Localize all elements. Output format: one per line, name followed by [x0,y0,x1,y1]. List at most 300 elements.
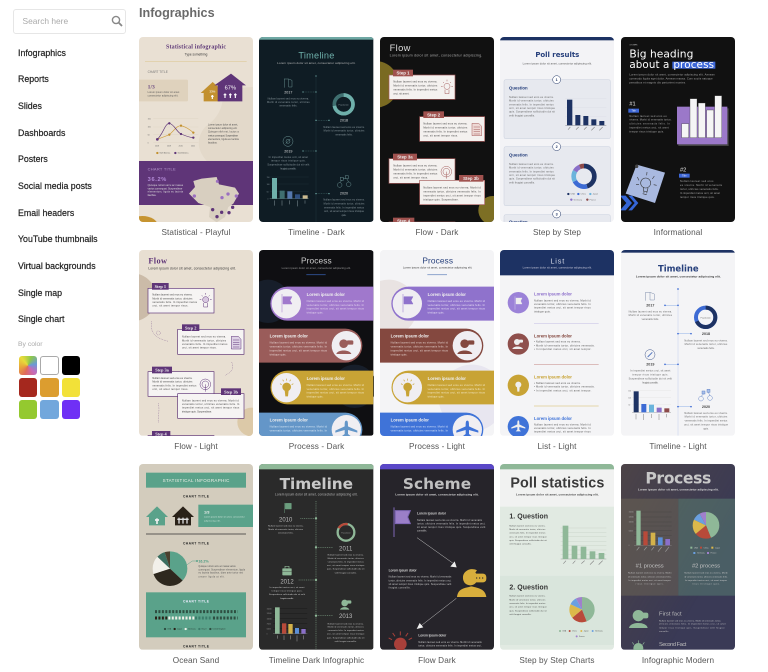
step 3a: Step 3a [397,154,413,159]
item 3: • Nullam laoreet sed eros eu viverra. [534,381,581,385]
card: Flow - Dark [380,37,494,222]
legend: France [579,636,585,638]
title: Lorem ipsum dolor sit amet, consectetur adipiscing. [389,53,482,57]
step #1: ultricies venenatis felis. In [629,121,671,125]
card: Process - Light [380,250,494,436]
step 1: Morbi id venenatis tortor, ultricies [393,83,438,87]
band 2: maroon: imperdiet metus orci, sit amet tempor risus [390,349,448,353]
panel: question 2: Nullam laoreet sed eros eu viverra. [510,595,546,598]
paragraph: Nullam laoreet sed eros eu viverra. [684,340,728,343]
header: STATISTICAL INFOGRAPHIC [163,478,230,483]
caption: Timeline Dark Infographic [269,656,364,665]
paragraph: In imperdiet metus orci, sit amet [270,586,305,589]
line chart: 2020 [179,145,183,147]
decoration: orange blob [127,216,158,234]
title: Lorem ipsum dolor sit amet, consectetur adipiscing elit. [282,266,352,270]
donut chart: Population [339,103,350,106]
icon: compass [645,350,655,360]
panel: pictogram chart [146,593,246,638]
one third callout: Lorem ipsum dolor sit amet, consectetur [204,516,245,519]
second fact: Second Fact [659,642,687,648]
bar chart: 100 [628,398,631,400]
bar chart [561,526,607,565]
title [148,257,236,271]
paragraph: Morbi id venenatis tortor, ultricies [267,101,311,104]
step #1 [628,101,672,133]
paragraph: Nullam laoreet sed eros eu viverra. [268,97,310,100]
text block 1: tortor, ultricies venenatis felis. In imperdiet metus orci, [417,523,485,526]
caption: Process - Dark [289,442,344,451]
band 3: yellow: Lorem ipsum dolor [307,376,346,381]
panel: process 1: 150000 [629,512,634,514]
bar chart: 50000 [267,629,271,631]
paragraph [268,156,310,170]
panel: question 1 [500,507,614,576]
nav: Posters: Posters [18,154,48,164]
panel: process 1: 100000 [629,522,634,524]
paragraph: quis. [703,428,709,431]
pie callout: Quisque rutrum arcu ac massa varius [198,565,237,568]
band 3: yellow: tristique quis. [307,395,324,399]
bar chart [566,98,607,130]
panel: process 1: 50000 [629,531,633,533]
step 1: Step 1 [396,70,410,75]
band 2: maroon: Lorem ipsum dolor [390,334,429,339]
band 2: maroon: tristique quis. [390,353,407,357]
title: Poll results [536,51,580,59]
icon: network [699,390,712,401]
text block 2: sit amet tempor risus tristique quis. Suspendisse velit [388,583,451,586]
panel: process 2: Nullam laoreet sed eros eu viverra. Morbi [684,572,728,575]
paragraph: penatibus et magnis dis parturient montes. [629,80,686,84]
title [277,50,356,65]
band 1: purple [271,287,374,321]
step 2: Morbi id venenatis tortor, ultricies [423,125,468,129]
legend: United Kingdom [213,628,226,631]
step 3a: Morbi id venenatis tortor, ultricies [393,167,438,171]
colour swatches [19,356,80,419]
step 3a: Nullam laoreet sed eros eu viverra. [152,377,193,380]
icon: houses: 67% [225,85,236,91]
paragraph: venenatis felis. [278,532,294,535]
text block 2: Nullam laoreet sed eros eu viverra. Morbi id venenatis [388,576,452,579]
paragraph: In imperdiet metus orci, sit amet [630,370,671,373]
title [403,256,472,270]
paragraph [327,554,365,575]
text block 2: tortor, ultricies venenatis felis. In imperdiet metus orci, [388,580,451,583]
item 2: • Morbi id venenatis tortor, ultricies venenatis. [534,344,595,348]
step #1: Nullam laoreet sed eros eu [629,114,667,118]
step 3b: Step 3b [463,176,479,181]
band 1: purple: imperdiet metus orci, sit amet tempor risus [427,307,485,311]
band 3: yellow: Lorem ipsum dolor [427,376,466,381]
text block 3: Lorem ipsum dolor [418,634,447,638]
bar chart [628,391,671,420]
legend: Germany [595,631,603,633]
panel: process 1: 125000 [629,517,634,519]
year 2020: 2020 [340,191,348,195]
paragraph: velit feugiat convallis. [335,640,357,643]
title [638,469,719,492]
paragraph: Morbi id venenatis tortor, ultricies [685,343,728,346]
band 4: blue: Lorem ipsum dolor [270,418,309,423]
item 2: • In imperdiet metus orci, sit amet tempor. [534,347,592,351]
card: Informational [621,37,735,222]
step 3a: Nullam laoreet sed eros eu viverra. [393,163,437,167]
paragraph [208,123,239,144]
header [500,250,614,276]
panel: question 3: 3 [556,212,558,216]
caption: Flow - Light [174,442,218,451]
caption: Step by Step [533,228,581,237]
panel: question 3 [504,210,611,234]
icon: person with speech bubble [457,570,486,597]
panel: process 1: id venenatis tortor, ultricies venenatis felis. [628,576,672,579]
icon: flag [285,78,292,87]
step #2: Nullam laoreet sed eros [680,180,714,183]
title: Process [301,256,332,266]
title: Lorem ipsum dolor sit amet, consectetur adipiscing elit. [275,493,358,497]
item 2 [508,334,595,355]
bar chart: 125000 [267,613,272,615]
legend: USA [167,628,172,631]
panel: process 2: In imperdiet metus orci, sit amet tempor [685,579,727,582]
panel: question 2: velit feugiat convallis. [509,180,536,184]
item 4: Lorem ipsum dolor [534,416,573,421]
step 2: Step 2 [185,326,196,331]
text block 1: convallis. [417,530,427,533]
title: Scheme [402,475,471,493]
icon: houses [201,73,246,101]
band 1: purple: Nullam laoreet sed eros eu viverra. Morbi id [307,299,365,303]
panel: question 2: velit feugiat convallis. [510,613,532,616]
year 2017: 2017 [285,90,293,94]
paragraph: quis. [342,214,347,217]
paragraph: venenatis felis. In imperdiet metus [328,629,365,632]
title: Lorem ipsum dolor sit amet, consectetur adipiscing elit. [636,275,721,279]
title [389,43,482,57]
bar chart on purple panel [677,95,729,146]
panel: question 2 [504,142,611,205]
purple map band: faucibus. [148,194,157,197]
paragraph [629,370,672,385]
nav: Single map: Single map [18,288,62,298]
one third callout: adipiscing elit. [204,520,221,523]
band 1: purple: tristique quis. [427,311,444,315]
panel: question 1: Morbi id venenatis tortor, ultricies [510,528,546,531]
title: Lorem ipsum dolor sit amet, consectetur adipiscing elit. [277,61,356,65]
paragraph: Morbi id venenatis tortor, ultricies [629,314,673,317]
step 4 [148,431,214,443]
item 1: Nullam laoreet sed eros eu viverra. Morbi id [534,299,592,303]
nav: Email headers: Email headers [18,208,74,218]
item 3: • In imperdiet metus orci, sit amet tempor. [534,389,592,393]
icon: houses: 33% [209,89,216,93]
panel: process 2: Japan [715,548,720,550]
paragraph [324,126,365,136]
bar chart: 0 [267,634,268,636]
first fact: Nullam laoreet sed eros eu viverra. Morbi id venenatis tortor, [659,620,721,623]
panel: question 2: Morbi id venenatis tortor, ultricies [509,165,555,169]
one third callout: 1/3 [148,84,155,90]
panel: question 1: velit feugiat convallis. [509,113,536,117]
bar chart: 150 [267,177,270,179]
first fact: convallis. [659,631,669,633]
icon: sticky note with bulb [626,164,665,203]
header [146,473,246,488]
band 3: yellow: venenatis tortor, ultricies venenatis felis. In [427,387,485,391]
paragraph: Suspendisse sollicitudin dui sit velit [629,378,672,381]
timeline axis [303,75,330,222]
title [636,265,721,279]
panel: process 2: id venenatis tortor, ultricies venenatis felis. [684,576,728,579]
icon: chevrons [620,195,638,210]
band 2: maroon [380,329,483,363]
chart title: CHART TITLE [183,495,210,499]
band 2: maroon: Nullam laoreet sed eros eu viverra. Morbi id [270,341,328,345]
item 1: imperdiet metus orci, sit amet tempor risus [534,306,592,310]
year 2019: 2019 [285,149,293,153]
header: Lorem ipsum dolor sit amet, consectetur adipiscing elit. [523,266,593,270]
line chart: North America [160,151,170,154]
year 2020: 2020 [702,405,710,409]
step 1: Nullam laoreet sed eros eu viverra. [393,79,437,83]
step 1: venenatis felis. In imperdiet metus [152,301,198,304]
band 3: yellow [391,371,494,405]
band 2: maroon: imperdiet metus orci, sit amet tempor risus [270,349,328,353]
band 2: maroon: Nullam laoreet sed eros eu viverra. Morbi id [390,341,448,345]
paragraph: Nullam laoreet sed eros eu viverra. [324,198,365,201]
one third callout: Lorem ipsum dolor sit amet [148,91,180,94]
panel: question 1: orci, sit amet tempor risus tristique [510,536,548,539]
card: List - Light [500,250,614,436]
legend [164,628,226,631]
panel: process 1: 0 [629,545,630,547]
step 1: Step 1 [155,284,166,289]
step #1: imperdiet metus orci, sit amet [629,125,669,129]
bar chart [267,608,308,642]
legend: Japan [584,631,589,633]
one third callout: consectetur adipiscing elit. [148,94,179,97]
paragraph: orci, sit amet tempor risus tristique [684,424,729,427]
donut chart [335,95,353,113]
chart title label: CHART TITLE [148,70,168,74]
text block 2: feugiat convallis. [388,587,411,590]
donut chart [696,308,715,327]
pie chart [161,560,179,578]
line chart: 100 [148,126,151,128]
caption: List - Light [538,442,576,451]
first fact: ultricies venenatis felis. In imperdiet metus orci, sit amet [659,623,726,626]
caption: Timeline - Light [649,442,707,451]
panel: question 2: Morbi id venenatis tortor, ultricies [510,599,546,602]
title [395,475,478,497]
nav: Slides: Slides [18,101,42,111]
caption: Statistical - Playful [162,228,230,237]
legend: Germany [574,198,582,201]
panel: process 1: #1 process [636,564,664,570]
paragraph: Suspendisse sollicitudin dui sit velit [268,163,310,166]
nav: YouTube thumbnails: YouTube thumbnails [18,234,98,244]
bar chart: 100 [267,184,270,186]
paragraph: elementum, ligula eu lacinia [208,138,239,141]
band 4: blue [380,413,483,447]
band 3: yellow: venenatis tortor, ultricies venenatis felis. In [307,387,365,391]
panel: question 2: orci, sit amet tempor risus tristique [510,606,548,609]
year 2017: 2017 [646,304,654,308]
bar chart: 150000 [267,609,272,611]
step 3b: tristique quis. Suspendisse. [423,197,459,201]
panel: question 1: 1 [556,78,558,82]
donut chart [335,521,358,544]
band 3: yellow: imperdiet metus orci, sit amet tempor risus [307,391,365,395]
paragraph: Morbi id venenatis tortor, ultricies [324,129,365,132]
step #1: Title [632,109,637,112]
year 2011: 2011 [339,547,353,553]
legend [567,192,598,201]
text block 3 [418,634,482,648]
panel: question 2: Question [509,152,528,157]
icon: flag [646,292,654,301]
paragraph [684,340,728,350]
pie callout: ornare ligula at elit. [198,576,225,579]
year 2018: 2018 [702,332,710,336]
step 1: orci, sit amet. [393,91,409,95]
title: Poll statistics [511,476,605,492]
paragraph: venenatis felis. [280,104,298,107]
text block 2 [388,569,452,590]
item 4: venenatis tortor, ultricies venenatis felis. In [534,426,592,430]
band 4: blue: venenatis tortor, ultricies venenatis felis. In [390,429,448,433]
card: Statistical - Playful [139,37,253,222]
panel: process 1: risus tristique quis. [636,583,664,586]
step #2: eu viverra. Morbi id venenatis [680,184,723,187]
nav: Infographics: Infographics [18,48,66,58]
paragraph: Morbi id venenatis tortor, ultricies [328,626,365,629]
band 1: purple [391,287,494,321]
band 4: blue: Nullam laoreet sed eros eu viverra. Morbi id [270,425,328,429]
nav: Reports: Reports [18,74,49,84]
band 2: maroon [259,329,363,363]
band 4: blue: Lorem ipsum dolor [390,418,429,423]
panel: question 2: venenatis felis. In imperdiet metus [510,602,546,605]
item 4: Nullam laoreet sed eros eu viverra. Morbi id [534,423,592,427]
step 4 [389,217,455,228]
donut chart: Population [701,317,712,320]
title: Lorem ipsum dolor sit amet, consectetur adipiscing elit. [523,61,593,65]
icon: compass [283,136,293,146]
line chart: 2018 [155,145,159,147]
band 3: yellow: Nullam laoreet sed eros eu viverra. Morbi id [427,383,485,387]
step 3a: orci, sit amet tempor risus. [152,388,189,391]
panel: question 1: quis. Suspendisse sollicitudin dui sit [510,539,547,542]
second fact [632,641,687,653]
panel: question 2: quis. Suspendisse sollicitudin dui sit [510,610,547,613]
search box [12,8,126,34]
step 2: venenatis felis. In imperdiet metus [182,343,228,346]
bar chart: 100000 [267,619,272,621]
band 2: maroon: Lorem ipsum dolor [270,334,309,339]
paragraph: metus consequat. Suspendisse [208,134,239,137]
line chart: 2019 [167,145,171,147]
title: Lorem ipsum dolor sit amet, consectetur adipiscing elit. [403,266,472,270]
step #2: tortor, ultricies venenatis felis. [680,188,719,191]
year 2010: 2010 [279,518,293,524]
purple map band: Quisque rutrum arcu ac massa [148,184,184,187]
step 3a: Step 3a [155,368,170,373]
band 4: blue: Nullam laoreet sed eros eu viverra. Morbi id [390,425,448,429]
bar chart: 0 [268,198,269,200]
line chart: 2021 [191,145,195,147]
panel: process 2: USA [694,547,699,550]
title: Timeline [299,50,335,60]
card: Timeline - Light [621,250,735,436]
title: Lorem ipsum dolor sit amet, consectetur adipiscing elit. [395,493,478,497]
card: Process - Dark [259,250,374,436]
caption: Informational [654,228,702,237]
paragraph: velit feugiat convallis. [335,572,357,575]
panel: process 2: #2 process [692,564,720,570]
title: Statistical infographic [166,44,226,50]
paragraph [629,311,673,321]
band 2: maroon: venenatis tortor, ultricies venenatis felis. In [270,345,328,349]
first fact: First fact [659,612,682,618]
legend: China [581,193,587,195]
panel: question 2: Nullam laoreet sed eros eu viverra. [509,162,554,166]
purple map band: CHART TITLE [148,166,176,171]
panel: process 1: Nullam laoreet sed eros eu viverra. Morbi [628,572,672,575]
line chart: 0 [148,142,149,144]
title [166,44,226,56]
step #2: tempor risus tristique quis. [680,196,715,199]
step 3a [148,367,214,397]
paragraph: faucibus. [208,141,218,144]
legend: Japan [593,193,598,195]
legend: Brazil [202,629,207,631]
card: Timeline - Dark [259,37,374,222]
purple map band: elementum, ligula eu lacinia [148,190,184,193]
panel: question 1: Nullam laoreet sed eros eu viverra. [510,525,546,528]
title: Process [645,469,711,488]
item 4 [508,416,592,438]
year 2019: 2019 [646,363,654,367]
year 2012: 2012 [281,580,295,586]
band 1: purple: tristique quis. [307,311,324,315]
item 1: venenatis tortor, ultricies venenatis felis. In [534,302,592,306]
paragraph: feugiat convallis. [642,382,659,385]
arrows: dotted connectors [151,322,233,423]
step 3a: venenatis felis. In imperdiet metus [393,171,438,175]
item 1: tristique quis. [534,310,551,314]
panel: question 1: Nullam laoreet sed eros eu viverra. [509,95,554,99]
paragraph: feugiat convallis. [281,167,297,170]
step #1: viverra. Morbi id venenatis tortor, [629,117,672,121]
step #2: Title [682,174,687,177]
band 3: yellow: Nullam laoreet sed eros eu viverra. Morbi id [307,383,365,387]
icon: flag [285,503,292,513]
paragraph: Morbi id venenatis tortor, ultricies [328,557,365,560]
panel: pictogram chart: CHART TITLE [183,600,210,604]
panel: question 2: venenatis felis. In imperdiet metus [509,169,555,173]
paragraph: Nullam laoreet sed eros eu viverra. [328,623,364,626]
step 2: orci, sit amet tempor risus. [423,133,458,137]
bar chart: 75000 [267,624,271,626]
icon: briefcase [283,567,292,576]
line chart: 50 [148,134,150,136]
title: Timeline [280,475,353,493]
step #2 [679,167,723,199]
paragraph: Nullam laoreet sed eros eu viverra. [328,554,364,557]
